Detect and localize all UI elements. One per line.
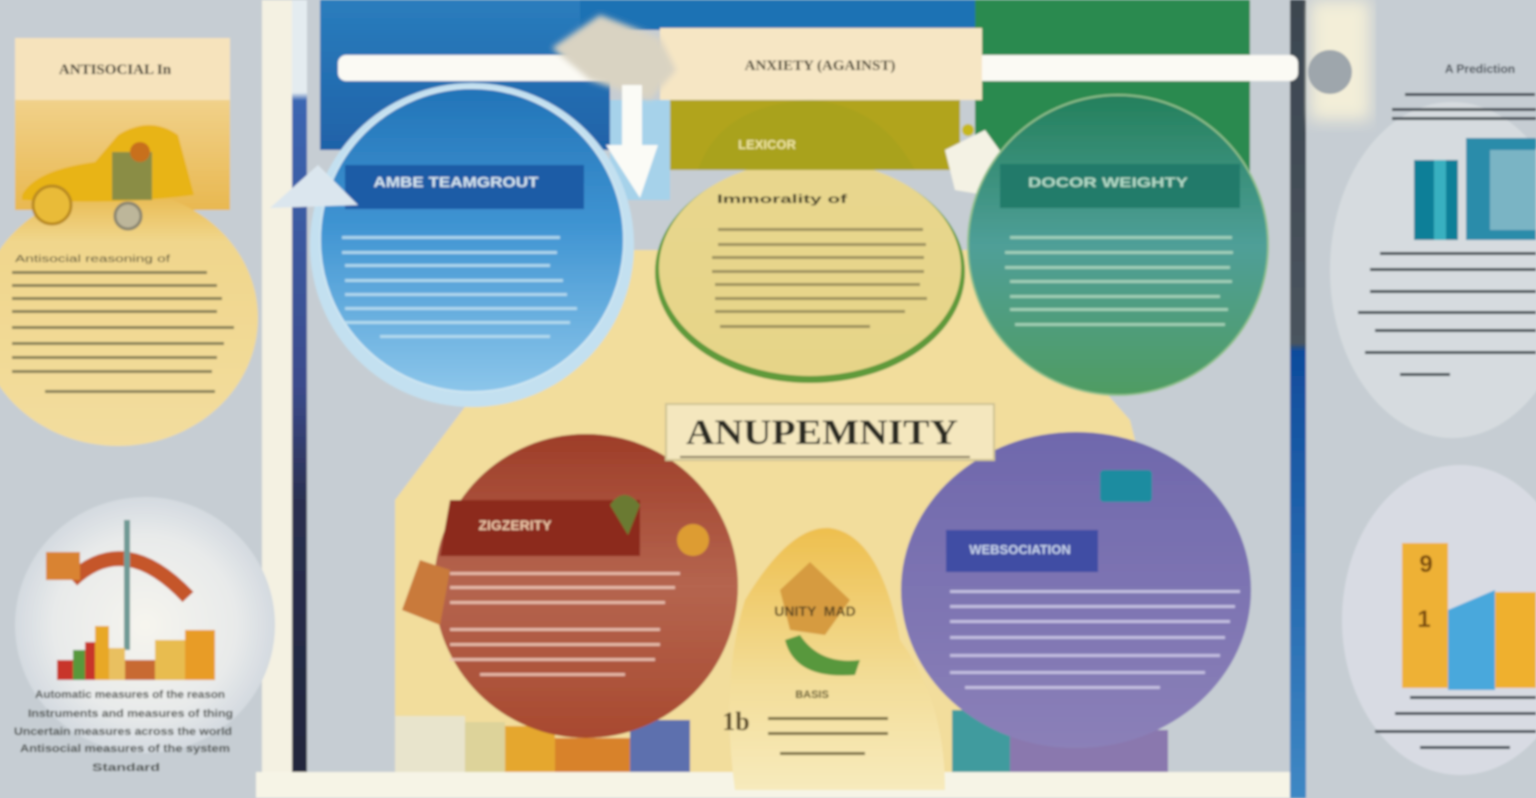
icon: small star shield [945,124,1003,195]
panel: olive circle [655,100,965,383]
body text [768,717,888,755]
label: UNITY MAD [774,603,856,619]
banner: AMBE TEAMGROUT [374,174,538,191]
icon: teal badge [1100,470,1152,502]
bar chart: 9 [1419,551,1433,578]
panel: green circle [968,95,1268,395]
icon: buildings [1414,138,1536,240]
icon: gear [1308,50,1352,94]
subtitle: BASIS [795,689,829,701]
left bottom text: Standard [92,762,160,774]
right body text [1358,252,1536,376]
panel: red circle [402,434,738,738]
panel: centre amber drop [722,528,945,790]
banner [698,100,915,170]
top colour bands [320,0,1250,200]
banner: DOCOR WEIGHTY [1028,174,1189,190]
left top yellow card [15,100,230,210]
body text [950,590,1240,689]
body text [1005,236,1233,326]
panel: left column [0,0,292,798]
panel: central yellow background [395,250,1150,772]
right heading [1392,62,1536,120]
banner: ZIGZERITY [478,517,552,533]
panel: left text circle: Antisocial reasoning of [15,254,170,265]
banner [345,165,584,209]
left bottom text: Antisocial measures of the system [20,743,230,755]
icon: leaf [785,635,860,676]
white header bar [338,55,1298,81]
body text [342,236,577,338]
icon: car [22,125,194,229]
left header card [15,38,230,100]
top header card [660,28,982,100]
left bottom text [14,689,233,774]
body text [712,228,927,328]
banner [1000,164,1240,208]
icon: left leaf [402,560,450,625]
banner: WEBSOCIATION [969,542,1071,557]
panel: left text circle [0,190,258,446]
left bottom text: Instruments and measures of thing [28,708,233,720]
left bottom text: Automatic measures of the reason [35,689,225,701]
icon: white down arrow [606,85,658,198]
icon: white triangle [270,165,358,208]
bar chart: 1 [1417,606,1431,633]
banner: LEXICOR [738,137,796,152]
vertical bars [292,0,307,772]
banner [946,530,1098,572]
subheading: Immorality of [717,192,849,206]
icon: small block: 1b [722,707,750,736]
white bottom strip [256,772,1290,798]
banner [440,500,640,556]
left header card: ANTISOCIAL In [59,62,172,78]
title: ANUPEMNITY [686,412,958,452]
panel: right column [1308,0,1536,775]
top header card: ANXIETY (AGAINST) [745,58,895,74]
panel: blue circle [270,83,634,407]
icon: sun coin [677,524,709,556]
title [666,404,994,460]
gauge chart [46,520,215,680]
panel: left bottom gauge circle [14,497,275,774]
body text [450,572,680,676]
right lower text [1375,696,1536,749]
left bottom text: Uncertain measures across the world [14,726,232,738]
right heading: A Prediction [1445,62,1515,76]
icon: sprout [610,495,640,535]
bottom colour blocks [395,710,1168,772]
bar chart [1402,543,1536,690]
icon: top cloud arrow [552,15,676,100]
panel: purple circle [901,432,1251,748]
